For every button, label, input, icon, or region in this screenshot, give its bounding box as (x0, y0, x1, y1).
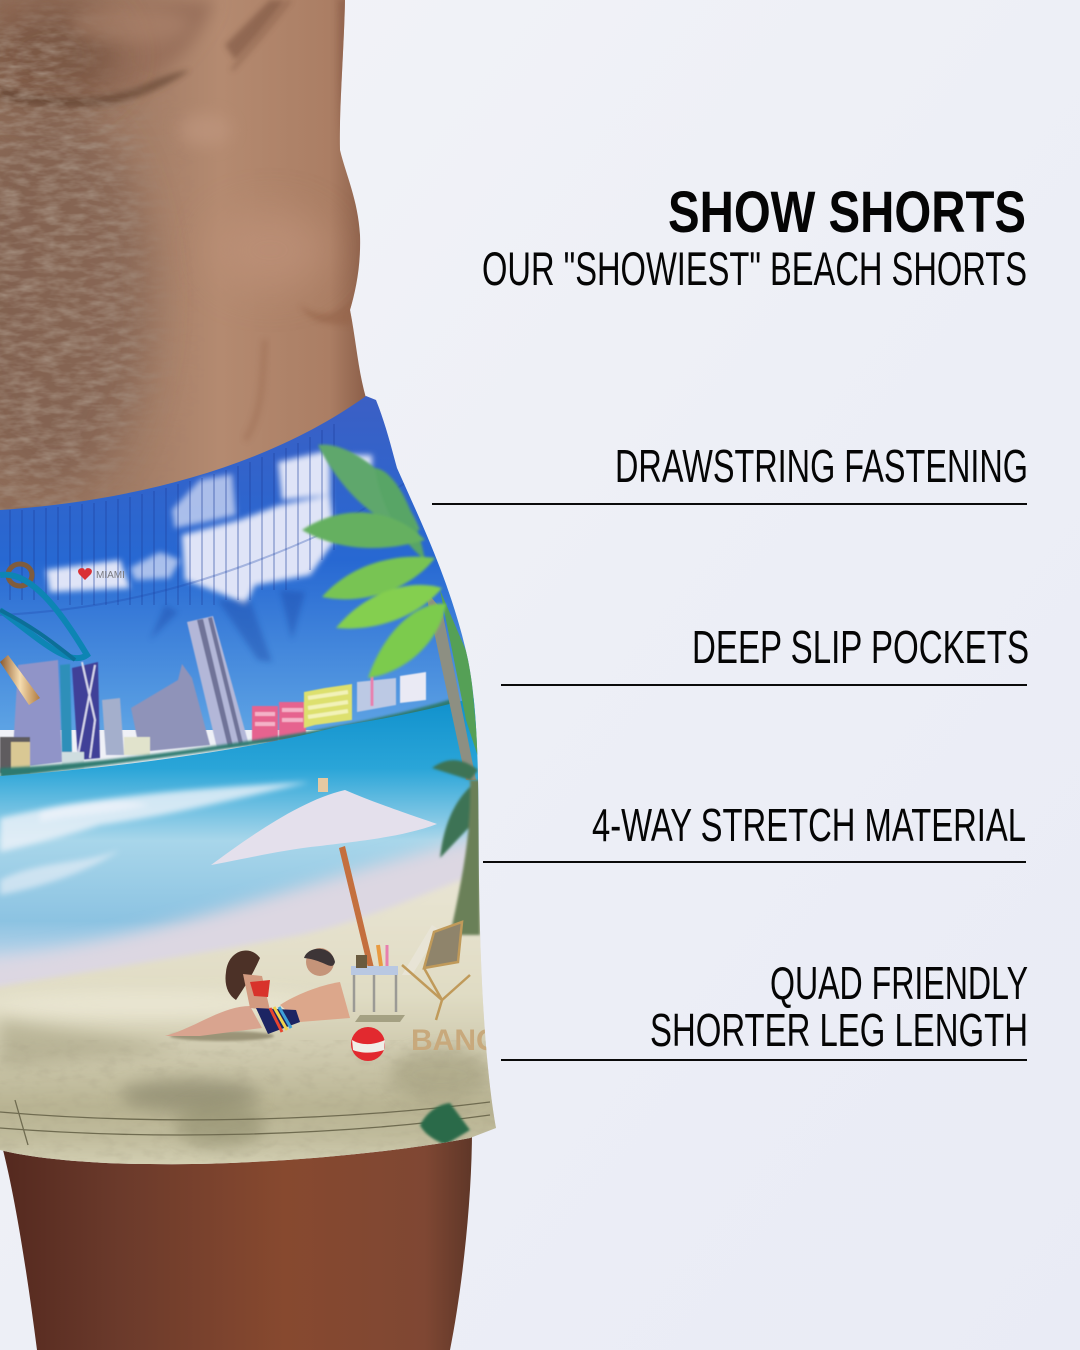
feature: quad friendly shorter leg length (501, 957, 1028, 1061)
print: palm shadow on hem (420, 1103, 470, 1145)
right edge shade (338, 1, 345, 118)
shorts label: I love Miami: MIAMI (96, 570, 125, 581)
swim shorts (0, 396, 496, 1164)
print: lounge chair (402, 922, 470, 1020)
print: clouds (46, 450, 372, 605)
photo: thigh (2, 1130, 472, 1350)
print: chair shadow (355, 1015, 405, 1022)
print: couple on the beach (165, 948, 350, 1041)
print: fabric fold shadows (150, 590, 305, 662)
print: shoreline trees (0, 698, 460, 778)
shorts label: I love Miami (78, 568, 125, 581)
print: palm trunk (425, 590, 476, 780)
print: lavender wet sand (0, 832, 479, 1164)
print: sky (0, 390, 500, 730)
print: art deco hotels (252, 672, 426, 742)
print: sand (0, 881, 496, 1164)
print: hem fold shadow (175, 1103, 265, 1147)
body hair (0, 20, 153, 520)
print: brand mark: BANG (411, 1024, 499, 1057)
drawstring cord (0, 564, 87, 705)
print: side seam green (440, 590, 479, 760)
print: lower palm (432, 760, 480, 935)
print: hem stitching (0, 1100, 490, 1145)
print: beach umbrella (211, 778, 437, 968)
highlights (186, 120, 220, 140)
hair shading (0, 110, 150, 490)
print: palm fronds (302, 445, 446, 678)
print: waistband seam (0, 480, 410, 615)
heading (482, 180, 1027, 295)
print: sea and shallows (0, 696, 480, 985)
drawstring aglet (0, 655, 40, 705)
print: beach ball (351, 1027, 385, 1061)
print: side table and drinks (351, 945, 398, 1012)
upper chest tone (125, 0, 213, 82)
photo: torso (0, 0, 366, 520)
rib creases (225, 0, 285, 60)
print: skyline towers (0, 616, 249, 773)
chest crease (0, 70, 190, 107)
print: surf foam (0, 782, 310, 895)
print: waistband ruffles (10, 424, 334, 605)
